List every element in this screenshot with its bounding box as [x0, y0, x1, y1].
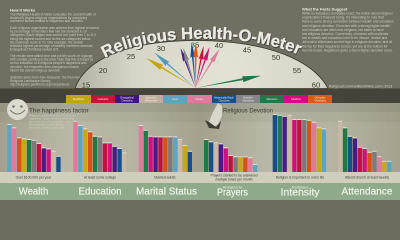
gauge numbers: 55 — [293, 66, 301, 75]
text block: how it works: Religious Landscape Survey. — [10, 79, 51, 83]
text block: what the facts suggest: income levels. Happiness gives a much higher devotion score. — [302, 48, 393, 52]
top background — [0, 0, 400, 90]
text block: how it works: devotion, but empowers inter-comparison should — [10, 65, 79, 69]
legend: Buddhists — [73, 97, 85, 101]
text block: happiness intro: educated and married adults. — [29, 122, 64, 126]
text block: how it works: The Religious Health-O-Meter evaluates the overall health of — [10, 12, 96, 16]
gauge numbers: 45 — [243, 46, 251, 54]
category labels: Marital Status — [136, 186, 197, 198]
gauge numbers: 50 — [272, 53, 280, 62]
text block: how it works — [10, 8, 99, 86]
gauge needles — [145, 43, 262, 91]
text block: what the facts suggest — [302, 6, 394, 52]
text block: what the facts suggest: there is some strong correlation between wealth and education — [302, 20, 394, 24]
text block: how it works: Each religious organization was ordered from highest to lowest — [10, 26, 99, 30]
legend: Evangelical — [120, 96, 134, 100]
text block: how it works: an fun indication of a religious people's happiness and — [10, 61, 87, 65]
legend: Christians — [314, 98, 326, 102]
category labels: Wealth — [19, 186, 48, 198]
legend: Muslims — [291, 97, 301, 101]
bar chart: intensity — [273, 114, 326, 172]
text block: what the facts suggest: and religious devotion. Churches with a strong higher wealth — [302, 24, 390, 28]
text block: how it works: Statistics taken from Pew Research, the Pew Research — [10, 76, 88, 80]
text block: what the facts suggest: organization's financial being. It's interesting to note that — [302, 16, 384, 20]
gauge numbers: 40 — [215, 41, 223, 50]
text block: happiness intro: have been found in wealthier, more — [29, 120, 71, 124]
legend: Christians — [242, 98, 254, 102]
text block: how it works: being the highest scored and on the six categories below, — [10, 37, 91, 41]
text block: what the facts suggest: Jehovah's Witnesses scored high in religious devotion, and at — [302, 40, 392, 44]
legend: Historically Black — [214, 96, 234, 100]
bar chart: education — [73, 121, 127, 172]
text block: how it works: http://religions.pewforum.org/comparisons — [10, 82, 70, 86]
text block: happiness intro: happiness. Higher levels of well-being — [29, 116, 75, 120]
dark band — [0, 88, 400, 103]
chart captions: At least some college — [84, 176, 116, 180]
category labels: Education — [78, 186, 122, 198]
chart captions: Religion is important in one's life — [276, 176, 324, 180]
legend: Hindus — [195, 97, 204, 101]
text block: what the facts suggest: What the Facts Suggest — [302, 6, 348, 12]
gauge numbers: 25 — [127, 52, 135, 61]
text block: how it works: inform the overall religious devotion. — [10, 68, 61, 72]
chart captions: Prayers started to be answered — [210, 174, 258, 178]
title: Religious Health-O-Meter — [100, 26, 302, 58]
gauge dial — [75, 40, 328, 91]
text block: how it works: Evangelical Christians ranked at 5. — [10, 48, 59, 52]
text block: what the facts suggest: and education are often less religious, but seem to have — [302, 28, 384, 32]
green label band — [0, 183, 400, 200]
gauge numbers: 30 — [157, 44, 165, 53]
gauge numbers: 60 — [312, 80, 320, 90]
legend: Mormons — [267, 97, 278, 101]
icon: praying hands — [205, 103, 222, 129]
gauge numbers: 35 — [191, 40, 199, 50]
legend: Witnesses — [145, 98, 158, 102]
text block: how it works: with needles pointing to the total. Note that this is meant as — [10, 58, 94, 62]
gauge numbers: 15 — [82, 80, 90, 90]
bar chart: attendance — [338, 121, 391, 172]
gauge numbers: 20 — [99, 66, 107, 75]
text block: how it works: categories. Each religion was scored one point from 1 to 11 if — [10, 33, 96, 37]
heading: religious devotion: Religious Devotion — [223, 108, 273, 114]
category labels — [19, 184, 393, 198]
bar chart: prayers — [204, 139, 257, 172]
chart captions: Married adults — [154, 176, 176, 180]
legend: Churches — [218, 98, 230, 102]
text block: how it works: combined factors related to happiness and devotion. — [10, 19, 84, 23]
text block: what the facts suggest: the top for their happiness scores, yet are at the bottom for — [302, 44, 388, 48]
text block: how it works: How It Works — [10, 8, 36, 12]
text block: how it works: by percentage of members that met the standard in six — [10, 30, 87, 34]
bar chart: wealth — [7, 124, 61, 172]
panel backgrounds — [0, 103, 400, 172]
text block: what the facts suggest: low religious devotion. Conversely, churches with moderate — [302, 32, 389, 36]
text block: how it works: America's largest religious organizations by comparing — [10, 16, 87, 20]
text block: what the facts suggest: low in wealth and education tend to be devout. Jewish and — [302, 36, 387, 40]
category labels: Answers to — [223, 184, 243, 190]
legend: Jehovah's — [145, 96, 157, 100]
legend: Jews — [172, 97, 179, 101]
text block: how it works: The results were tallied here and put the score on a gauge, — [10, 54, 93, 58]
chart captions: multiple times per month — [216, 178, 253, 182]
text block: what the facts suggest: While no indicators correlates exact, the notion about religious — [302, 12, 393, 16]
icon: smiley face — [7, 99, 28, 120]
text block: happiness intro: Religious groups have been ranked by — [29, 114, 76, 118]
category labels: Religious — [292, 184, 308, 190]
category labels: Attendance — [342, 186, 393, 198]
legend: Orthodox — [315, 96, 326, 100]
caption band — [0, 172, 400, 183]
text block: happiness intro: Members, surveyed about life. — [29, 126, 65, 130]
text block: how it works: the maximum score is 70. One example: the Jewish — [10, 40, 83, 44]
heading: the happiness factor: The happiness factor — [29, 108, 90, 114]
text block: happiness intro — [29, 114, 76, 130]
category labels: Intensity — [280, 188, 320, 198]
chart captions: Over $100,000 per year — [16, 176, 52, 180]
category labels: Prayers — [217, 188, 248, 198]
chart captions: Attend church at least weekly — [345, 176, 389, 180]
bar chart: marital status — [139, 125, 192, 172]
chart captions — [16, 174, 389, 182]
legend: Mainline — [243, 96, 253, 100]
gauge numbers — [82, 40, 320, 90]
legend — [66, 95, 332, 103]
text block: how it works: received highest percentage of wealthy members whereas — [10, 44, 93, 48]
credit line: ReligiousCommunitiesOnline.com | 2013 — [329, 84, 392, 88]
title: Religious Health-O-Meter — [104, 28, 302, 58]
legend: Christians — [121, 98, 133, 102]
legend: Catholics — [98, 97, 109, 101]
